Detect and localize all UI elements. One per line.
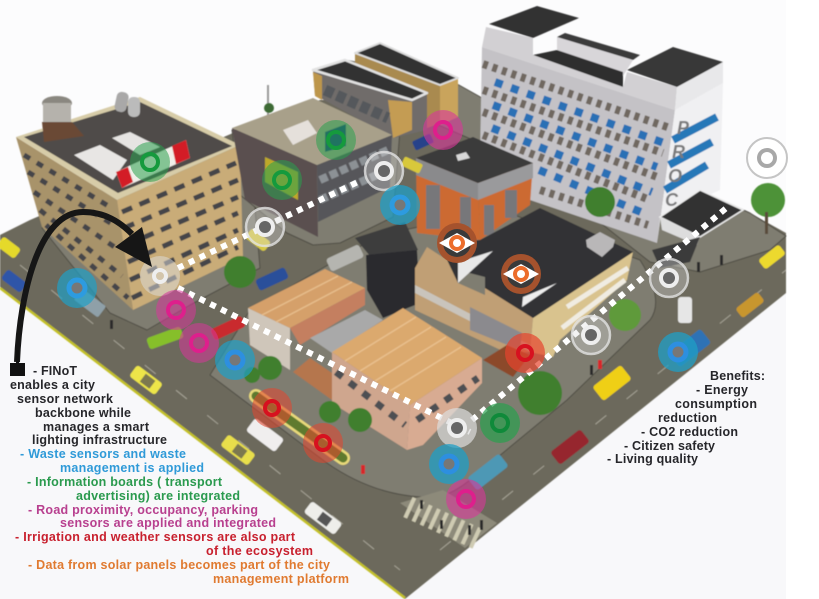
text block: benefits: - CO2 reduction — [641, 425, 738, 439]
text: FINoT description: manages a smart — [43, 420, 150, 434]
icon: street lamp marker — [10, 350, 25, 376]
text: solar panel data: - Data from solar panels becomes part of the city — [28, 558, 330, 572]
sensor targets: blue waste sensors — [57, 185, 698, 484]
text block: benefits: Benefits: — [710, 369, 765, 383]
text: FINoT description — [10, 364, 167, 447]
sensor targets: red irrigation sensors — [252, 333, 545, 463]
ground and roads — [0, 100, 786, 599]
text: FINoT description: enables a city — [10, 378, 95, 392]
sensor targets: green information boards — [130, 120, 520, 443]
text: waste sensors — [20, 447, 204, 475]
text: road sensors: sensors are applied and integrated — [60, 516, 276, 530]
text block: FINoT features — [10, 364, 349, 586]
text: waste sensors: - Waste sensors and waste — [20, 447, 186, 461]
text: irrigation and weather sensors — [15, 530, 313, 558]
cars — [0, 133, 786, 535]
arrow: from FINoT label to lighting pole — [17, 212, 152, 362]
building: large white office building — [480, 6, 743, 268]
text block: benefits: consumption — [675, 397, 757, 411]
text: FINoT description: backbone while — [35, 406, 131, 420]
text block: benefits — [607, 369, 765, 466]
text: waste sensors: management is applied — [60, 461, 204, 475]
text: road sensors: - Road proximity, occupancy, parking — [28, 503, 258, 517]
text block: benefits: - Citizen safety — [624, 439, 715, 453]
building: gravel roof tan building — [415, 208, 633, 377]
text block: benefits: - Living quality — [607, 452, 698, 466]
text: information boards: - Information boards ( transport — [27, 475, 223, 489]
small tan building rear — [355, 43, 458, 128]
yellow road edge — [0, 288, 405, 598]
text: FINoT description: lighting infrastructure — [32, 433, 167, 447]
text block: benefits: - Energy — [696, 383, 748, 397]
text: solar panel data: management platform — [213, 572, 349, 586]
text: PROC sign on building: R — [672, 142, 685, 162]
sensor targets: magenta parking sensors — [156, 110, 486, 519]
text: PROC sign on building: O — [668, 166, 682, 186]
text: PROC sign on building: P — [677, 118, 690, 138]
building: tan corner building — [16, 91, 243, 310]
small tan building front — [313, 60, 427, 138]
text: FINoT description: sensor network — [17, 392, 113, 406]
building: terracotta roof front — [332, 308, 482, 450]
text: PROC sign on building — [665, 118, 690, 210]
road lane markings — [20, 265, 786, 570]
building: terracotta roof rear — [248, 269, 383, 400]
crosswalk — [400, 490, 497, 548]
text: information boards: advertising) are integrated — [76, 489, 240, 503]
red hydrants and pedestrians — [110, 255, 723, 535]
pavement blocks — [42, 60, 786, 497]
planter strip — [256, 396, 343, 458]
antenna mast — [264, 85, 274, 132]
text: information boards — [27, 475, 240, 503]
text block: benefits: reduction — [658, 411, 717, 425]
text: road sensors — [28, 503, 276, 530]
text: solar panel data — [28, 558, 349, 586]
sensor targets: white smart lighting — [140, 138, 787, 448]
text: irrigation and weather sensors: - Irrigation and weather sensors are also part — [15, 530, 296, 544]
building: dark grey building with billboard — [232, 98, 392, 237]
text: FINoT description: - FINoT — [33, 364, 77, 378]
dark central street — [355, 222, 420, 318]
sensor targets: orange solar panels — [437, 223, 541, 294]
network: white dotted links — [178, 180, 730, 432]
text: irrigation and weather sensors: of the ecosystem — [206, 544, 313, 558]
text: PROC sign on building: C — [665, 190, 679, 210]
building: orange and grey building — [416, 137, 533, 240]
trees — [224, 183, 785, 432]
